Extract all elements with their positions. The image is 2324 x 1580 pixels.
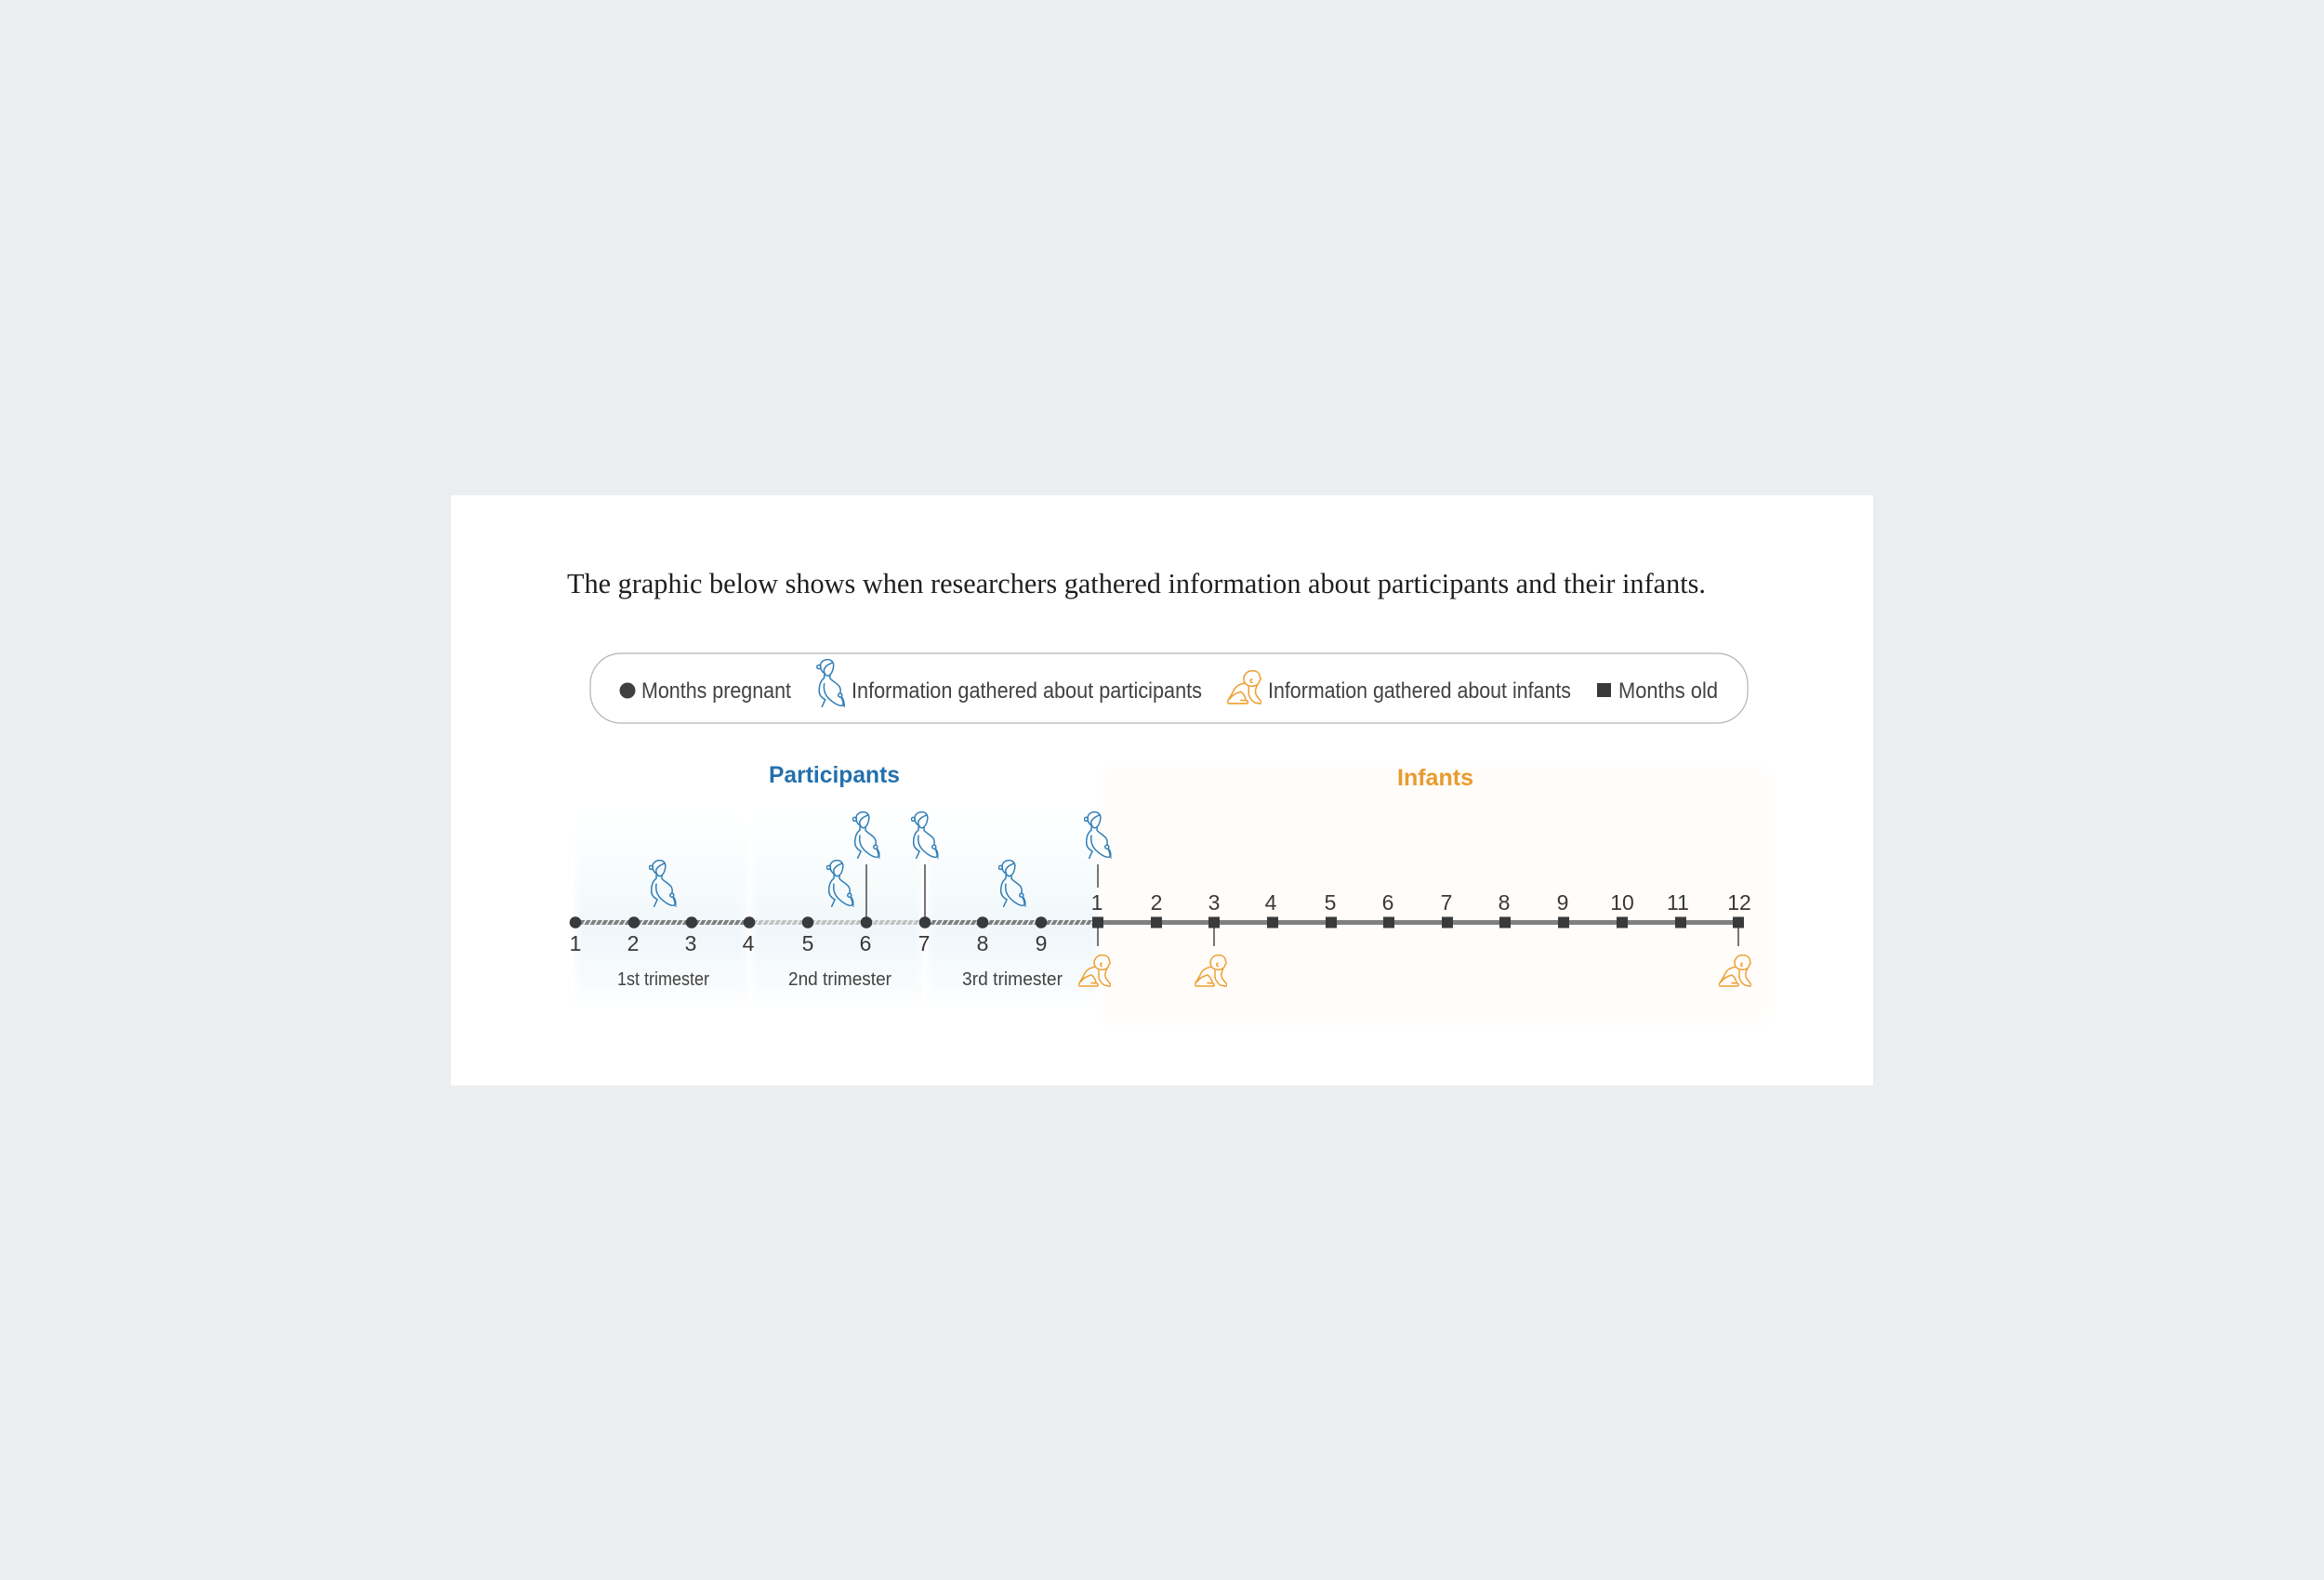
pregnancy line: second trimester	[749, 920, 925, 925]
numbers: months old: 7	[1441, 890, 1452, 915]
icon: infant legend	[1228, 671, 1261, 704]
numbers: months pregnant: 1	[570, 931, 581, 955]
numbers: months pregnant: 8	[977, 931, 988, 955]
pregnancy line: first trimester	[575, 920, 749, 925]
icon: infant, month 3	[1195, 955, 1227, 986]
numbers: months old: 8	[1499, 890, 1510, 915]
band: first trimester background	[576, 799, 746, 1015]
legend label: months pregnant: Months pregnant	[641, 678, 791, 704]
band: infants background	[1103, 768, 1768, 1020]
icon: participant, third trimester	[998, 861, 1025, 906]
numbers: months pregnant: 5	[802, 931, 813, 955]
numbers: months pregnant: 3	[685, 931, 696, 955]
band: third trimester background	[929, 799, 1098, 1015]
numbers: months pregnant: 2	[627, 931, 639, 955]
numbers: months pregnant: 4	[743, 931, 755, 955]
heading: infants: Infants	[1397, 765, 1473, 791]
numbers: months old	[1091, 890, 1751, 915]
numbers: months old: 2	[1151, 890, 1162, 915]
icon: participant, second trimester	[826, 861, 853, 906]
months old markers	[1092, 916, 1744, 928]
pregnancy line: third trimester	[925, 920, 1098, 925]
numbers: months old: 1	[1091, 890, 1103, 915]
icon: participant, month 7	[911, 812, 938, 858]
icon: infant, month 1	[1079, 955, 1111, 986]
icon: pregnant participant legend	[817, 660, 844, 706]
icon: participant, first trimester	[649, 861, 676, 906]
numbers: months old: 10	[1610, 890, 1634, 915]
numbers: months old: 12	[1727, 890, 1751, 915]
band: second trimester background	[753, 799, 921, 1015]
infant line	[1098, 920, 1738, 925]
icon: infant, month 12	[1720, 955, 1751, 986]
legend label: participants: Information gathered about participants	[852, 678, 1202, 704]
months pregnant markers	[570, 916, 1047, 928]
legend	[590, 653, 1748, 723]
numbers: months old: 5	[1325, 890, 1336, 915]
legend label: infants: Information gathered about infants	[1268, 678, 1571, 704]
numbers: months old: 6	[1382, 890, 1393, 915]
connectors	[866, 864, 1738, 946]
numbers: months pregnant: 9	[1036, 931, 1047, 955]
heading: participants: Participants	[769, 762, 900, 788]
icon: participant, month 6	[852, 812, 879, 858]
numbers: months pregnant	[570, 931, 1047, 955]
numbers: months old: 4	[1265, 890, 1277, 915]
numbers: months pregnant: 7	[918, 931, 930, 955]
legend label: months old: Months old	[1618, 678, 1718, 704]
legend: square marker	[1597, 683, 1611, 697]
numbers: months old: 3	[1208, 890, 1220, 915]
label: 3rd trimester: 3rd trimester	[962, 969, 1063, 990]
label: 2nd trimester: 2nd trimester	[788, 969, 891, 990]
title text: The graphic below shows when researchers gathered information about participants and their infants.	[567, 567, 1706, 599]
numbers: months pregnant: 6	[860, 931, 871, 955]
numbers: months old: 9	[1557, 890, 1568, 915]
icon: participant, 1 month postpartum	[1084, 812, 1111, 858]
timeline axis	[570, 864, 1744, 946]
panel: white card	[451, 495, 1873, 1086]
legend: circle marker	[619, 682, 636, 699]
legend frame	[590, 653, 1748, 723]
numbers: months old: 11	[1667, 890, 1689, 915]
label: 1st trimester: 1st trimester	[617, 969, 709, 990]
